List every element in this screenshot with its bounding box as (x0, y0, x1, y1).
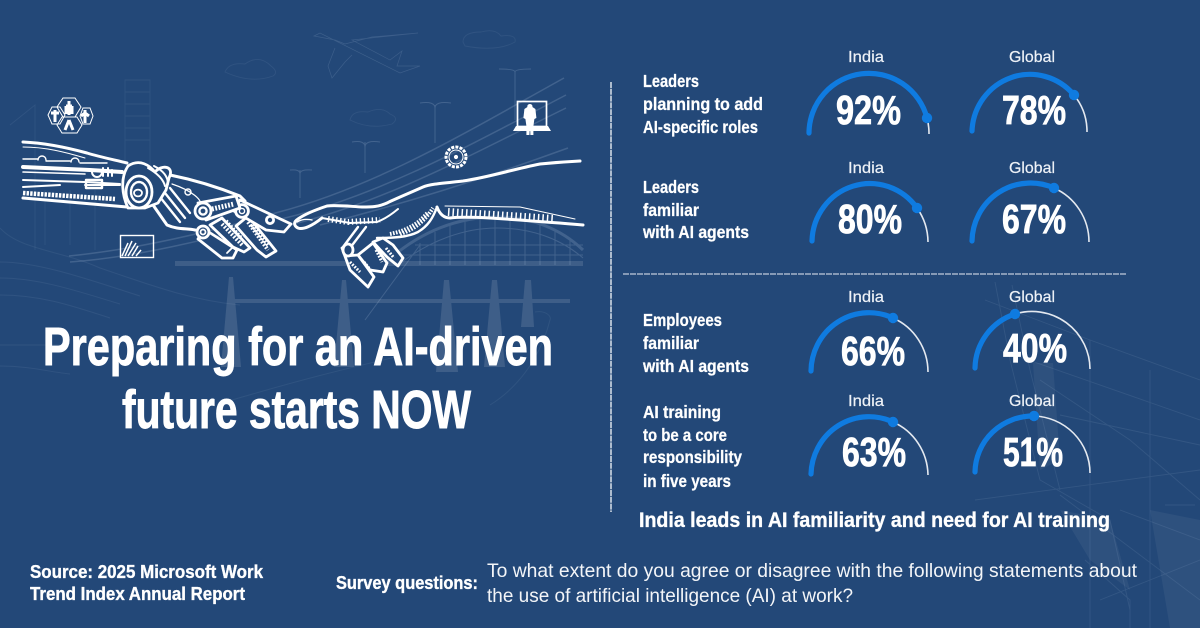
row label: leaders familiar with AI agents: Leaders (643, 177, 699, 197)
gauge: row 2 India 80% (812, 160, 928, 242)
gauge: row 1 Global 78% (972, 49, 1087, 133)
source note: Trend Index Annual Report (30, 584, 245, 604)
gauge: row 1 India 92%: India (848, 49, 884, 66)
icon: person before screen (513, 102, 551, 135)
finger joints (195, 196, 291, 258)
row label: leaders planning to add AI roles (643, 71, 763, 137)
icon: gear (446, 147, 466, 167)
gauge: row 3 Global 40%: 40% (1003, 325, 1067, 371)
gauge: row 4 Global 51% (975, 393, 1090, 475)
row label: AI training core responsibility (643, 402, 742, 491)
illustration: human hand (295, 161, 583, 287)
gauge: row 3 India 66%: 66% (841, 328, 905, 374)
highway lines (69, 78, 568, 262)
row label: leaders planning to add AI roles: Leaders (643, 71, 699, 91)
survey questions note: the use of artificial intelligence (AI) at work? (487, 585, 853, 607)
title: Preparing for an AI-driven (43, 317, 553, 377)
title: future starts NOW (122, 380, 471, 440)
gauge: row 3 India 66%: India (848, 289, 884, 306)
row label: employees familiar with AI agents: Employees (643, 310, 722, 330)
ship sketch, bottom right (975, 282, 1200, 628)
gauge: row 2 India 80%: India (848, 160, 884, 177)
road decks and pylons (175, 261, 583, 372)
row label: AI training core responsibility: in five years (643, 471, 731, 491)
row label: leaders familiar with AI agents (642, 177, 749, 242)
row label: AI training core responsibility: AI training (643, 402, 721, 422)
bridge arch (365, 217, 583, 320)
gauge: row 3 Global 40% (975, 289, 1090, 371)
hills contour (0, 228, 550, 405)
row label: employees familiar with AI agents: familiar (643, 333, 699, 353)
row label: leaders planning to add AI roles: AI-specific roles (643, 117, 758, 137)
row label: employees familiar with AI agents (642, 310, 749, 376)
gauge: row 1 Global 78%: 78% (1002, 87, 1066, 133)
gauge: row 2 Global 67%: 67% (1002, 196, 1066, 242)
survey questions note (336, 560, 1138, 607)
title (43, 317, 553, 440)
row label: AI training core responsibility: to be a core (643, 425, 727, 445)
gauge: row 4 India 63%: 63% (842, 429, 906, 475)
survey questions note: Survey questions: (336, 573, 478, 593)
survey questions note: To what extent do you agree or disagree with the following statements about (487, 560, 1138, 582)
gauge: row 4 Global 51%: Global (1009, 393, 1055, 410)
gauge: row 4 Global 51%: 51% (1003, 429, 1063, 475)
gauge: row 1 India 92%: 92% (836, 87, 901, 133)
gauge: row 3 Global 40%: Global (1009, 289, 1055, 306)
gauge: row 1 Global 78%: Global (1009, 49, 1055, 66)
row label: employees familiar with AI agents: with AI agents (642, 356, 749, 376)
gauge: row 2 Global 67% (972, 160, 1089, 242)
illustration: robotic arm (23, 142, 291, 258)
gauge: row 4 India 63% (811, 393, 928, 475)
wrist joint (123, 163, 171, 208)
fingers (342, 227, 403, 287)
source note (30, 562, 264, 604)
row label: leaders familiar with AI agents: familiar (643, 200, 699, 220)
source note: Source: 2025 Microsoft Work (30, 562, 264, 582)
gauge: row 4 India 63%: India (848, 393, 884, 410)
clouds and street lamps (10, 31, 515, 250)
gauge: row 2 Global 67%: Global (1009, 160, 1055, 177)
row label: leaders planning to add AI roles: planning to add (643, 94, 763, 114)
divider lines (611, 82, 1127, 512)
gauge: row 2 India 80%: 80% (838, 196, 902, 242)
row label: leaders familiar with AI agents: with AI agents (642, 222, 749, 242)
callout: India leads: India leads in AI familiarity and need for AI training (639, 508, 1110, 532)
icon: hatched frame (120, 236, 154, 258)
icon: people in hexagons (48, 98, 93, 133)
gauge: row 1 India 92% (809, 49, 932, 134)
gauge: row 3 India 66% (811, 289, 928, 374)
plane outline (314, 33, 420, 78)
row label: AI training core responsibility: responsibility (643, 447, 742, 467)
